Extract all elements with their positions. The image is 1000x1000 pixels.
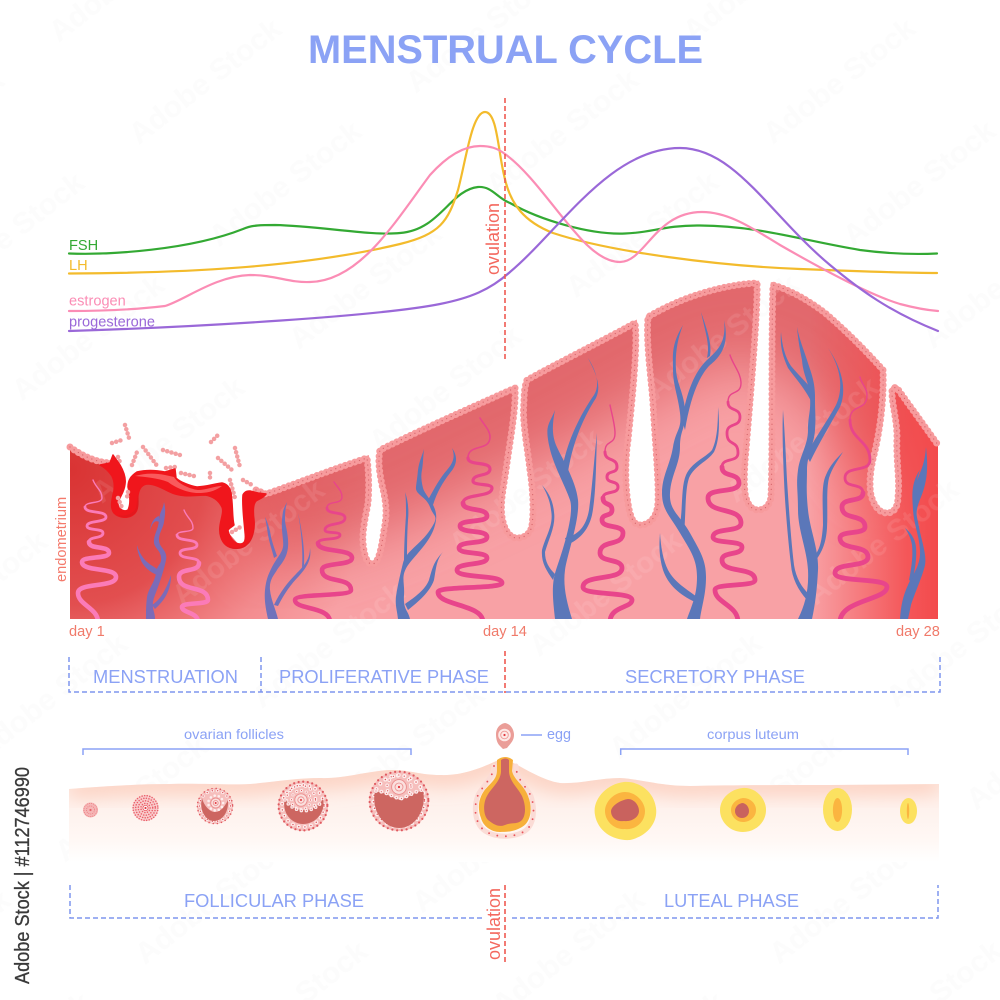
curve: estrogen bbox=[69, 146, 938, 311]
endometrium panel bbox=[60, 280, 950, 622]
phase: follicular: FOLLICULAR PHASE bbox=[184, 891, 364, 911]
label: day 28: day 28 bbox=[896, 624, 940, 640]
curve: FSH bbox=[69, 187, 937, 254]
spiral artery: late proliferative bbox=[438, 418, 502, 622]
egg callout bbox=[521, 727, 571, 743]
egg callout: egg bbox=[547, 727, 571, 743]
follicle stage 1 bbox=[83, 802, 98, 818]
corpus luteum stage 3 bbox=[823, 788, 852, 831]
endometrium label: endometrium bbox=[54, 497, 70, 582]
follicle stage 3 bbox=[197, 788, 233, 824]
hormone labels bbox=[69, 238, 155, 330]
uterine phase bracket bbox=[69, 651, 940, 693]
spiral artery: early secretory bbox=[583, 405, 632, 622]
label: estrogen: estrogen bbox=[69, 294, 126, 310]
spiral artery: early proliferative bbox=[295, 482, 352, 622]
spiral artery: mid secretory bbox=[708, 355, 755, 622]
ovarian follicles label and bracket: ovarian follicles bbox=[184, 727, 284, 743]
corpus luteum label and bracket bbox=[621, 727, 908, 755]
ovary tissue band bbox=[69, 760, 939, 845]
ovulation label: ovulation bbox=[483, 203, 503, 275]
ovarian phase bracket bbox=[70, 885, 938, 965]
ovulation marker line bbox=[504, 98, 506, 362]
vein: mid secretory bbox=[659, 312, 726, 619]
follicle stage 4 bbox=[278, 781, 328, 831]
shed epithelium cells bbox=[112, 425, 252, 498]
cells trapped in shed crypts bbox=[118, 492, 242, 532]
vein: menstruation bbox=[137, 502, 171, 619]
corpus luteum stage 2 bbox=[720, 788, 766, 832]
rupturing follicle bbox=[475, 757, 533, 836]
label: day 1: day 1 bbox=[69, 624, 105, 640]
stock credit: Adobe Stock | #112746990 bbox=[12, 767, 34, 984]
spiral artery: menstruation 1 bbox=[78, 480, 116, 622]
phase: menstruation: MENSTRUATION bbox=[93, 667, 238, 687]
epithelium lining bbox=[70, 283, 938, 564]
egg bbox=[496, 723, 514, 749]
follicle stage 5 bbox=[369, 771, 429, 831]
ovulation label lower: ovulation bbox=[484, 888, 504, 960]
spiral artery: menstruation 2 bbox=[177, 510, 208, 622]
ovarian follicles label and bracket bbox=[83, 727, 411, 755]
phase: luteal: LUTEAL PHASE bbox=[664, 891, 799, 911]
vein: late secretory bbox=[781, 327, 843, 619]
phase: proliferative: PROLIFERATIVE PHASE bbox=[279, 667, 489, 687]
label: progesterone: progesterone bbox=[69, 314, 155, 330]
menstrual bleeding bbox=[100, 455, 266, 549]
blood vessels: arteries and veins bbox=[78, 312, 927, 622]
corpus luteum stage 4 bbox=[900, 798, 917, 824]
vein: early secretory bbox=[542, 358, 598, 619]
corpus luteum label and bracket: corpus luteum bbox=[707, 727, 799, 743]
label: FSH: FSH bbox=[69, 238, 98, 254]
vein: end of cycle bbox=[900, 447, 927, 619]
title: MENSTRUAL CYCLE bbox=[308, 28, 703, 72]
follicle stage 2 bbox=[132, 795, 158, 821]
corpus luteum stage 1 bbox=[595, 782, 656, 840]
spiral artery: late secretory bbox=[835, 377, 887, 622]
endometrium tissue bbox=[60, 280, 950, 620]
vein: late proliferative bbox=[396, 448, 456, 619]
hormone chart bbox=[69, 112, 938, 331]
curve: LH bbox=[69, 112, 937, 274]
label: day 14: day 14 bbox=[483, 624, 527, 640]
curve: progesterone bbox=[69, 148, 938, 331]
phase: secretory: SECRETORY PHASE bbox=[625, 667, 805, 687]
label: LH: LH bbox=[69, 258, 88, 274]
vein: early proliferative bbox=[265, 502, 310, 619]
